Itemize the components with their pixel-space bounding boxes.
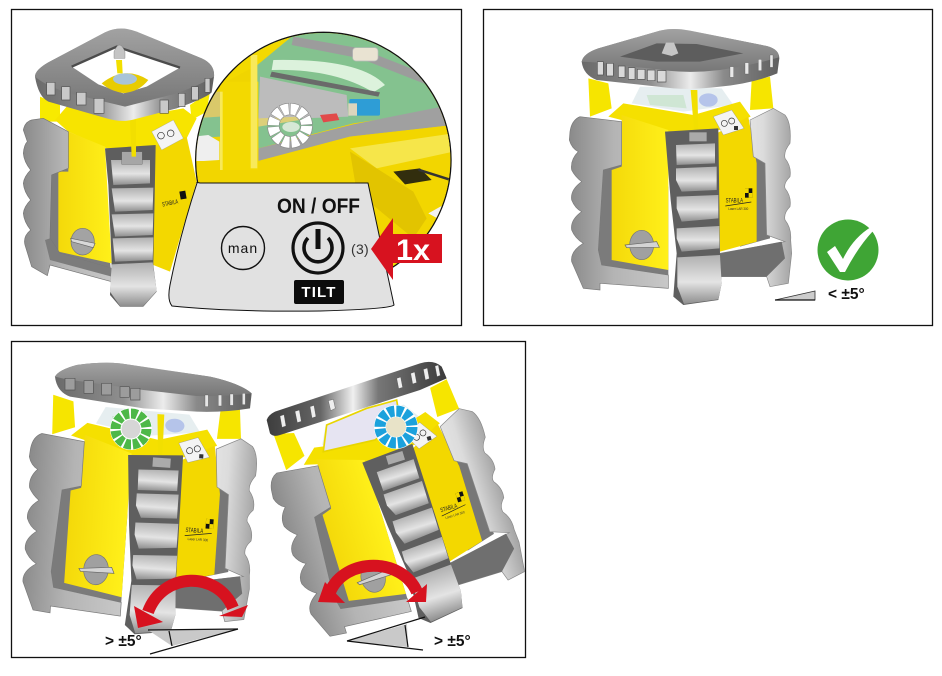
button: power — [293, 223, 343, 273]
icon: tilt wedge right — [347, 617, 425, 650]
arrow: press 1x: 1x — [396, 234, 430, 267]
button: man: man — [228, 240, 258, 256]
illustration: laser device — [23, 28, 214, 307]
label: ON / OFF: ON / OFF — [277, 195, 360, 218]
label: greater than 5 degrees right: > ±5° — [434, 633, 471, 650]
control panel — [169, 182, 394, 311]
button: man — [222, 226, 264, 270]
arrow: rocking left — [134, 581, 248, 628]
icon: white LED burst — [273, 109, 307, 142]
icon: small wedge — [775, 291, 815, 300]
icon: green LED burst — [110, 408, 152, 450]
panel: level within tilt range — [484, 10, 932, 326]
illustration: laser device: STABILA — [162, 198, 179, 209]
icon: blue LED burst — [374, 405, 418, 449]
panel: tilted beyond range — [12, 342, 534, 658]
icon: tilt wedge left — [148, 629, 238, 654]
illustration: device tilted right — [17, 392, 262, 642]
label: TILT: TILT — [301, 284, 337, 301]
illustration: laser device level — [569, 29, 792, 305]
arrow: press 1x — [371, 218, 442, 280]
label: less than 5 degrees: < ±5° — [828, 286, 865, 303]
label: (3): (3) — [351, 241, 369, 257]
illustration: device tilted left — [255, 373, 534, 656]
magnified inset: LED detail — [195, 32, 452, 268]
illustration: flat top ring left — [55, 363, 252, 412]
arrow: rocking right — [318, 566, 427, 603]
icon: green check — [818, 220, 878, 280]
label: greater than 5 degrees: > ±5° — [105, 633, 142, 650]
label: TILT — [294, 280, 344, 304]
illustration: edge-on top ring right — [267, 362, 447, 452]
panel: power on, tilt button — [12, 10, 462, 326]
